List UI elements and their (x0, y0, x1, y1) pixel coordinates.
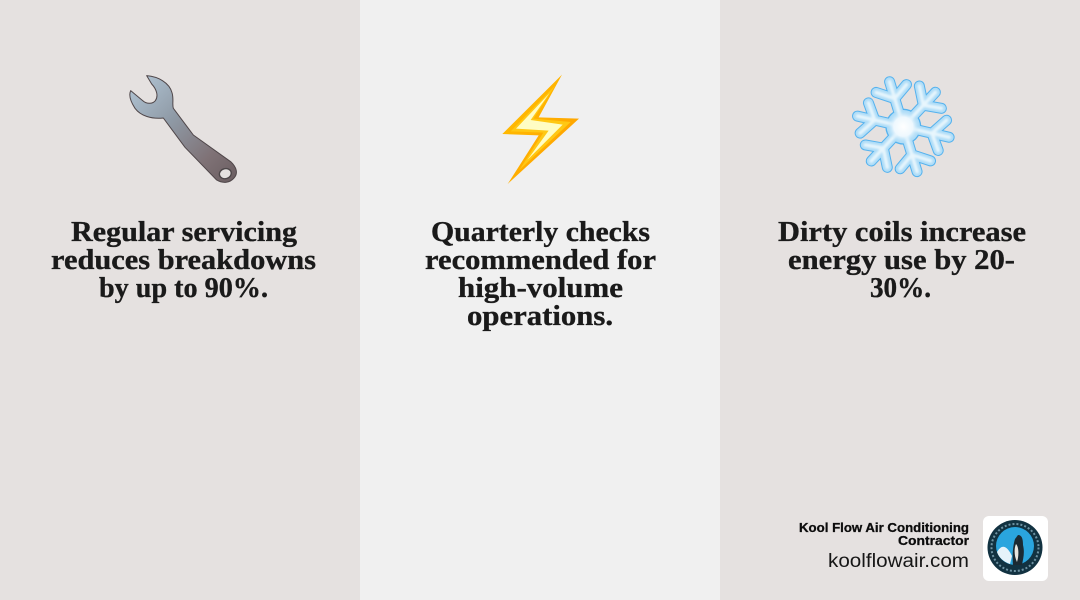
footer: company name: Kool Flow Air Conditioning (799, 520, 969, 535)
heading: quarterly checks: Quarterly checks (431, 216, 650, 248)
icon: lightning bolt (502, 75, 579, 184)
panel: servicing (0, 0, 360, 600)
heading: quarterly checks: operations. (467, 300, 613, 332)
panel: quarterly checks (360, 0, 720, 600)
heading: dirty coils: Dirty coils increase (778, 216, 1026, 248)
heading: dirty coils: 30%. (870, 272, 931, 304)
heading: servicing: by up to 90%. (99, 272, 268, 304)
heading: quarterly checks: high-volume (458, 272, 623, 304)
footer: company name: Contractor (898, 533, 969, 548)
icon: wrench (130, 76, 236, 182)
heading: servicing: Regular servicing (71, 216, 298, 248)
heading: dirty coils: energy use by 20- (788, 244, 1015, 276)
footer: website: koolflowair.com (828, 551, 969, 572)
heading: quarterly checks: recommended for (425, 244, 656, 276)
panel: dirty coils (720, 0, 1080, 600)
heading: servicing: reduces breakdowns (51, 244, 316, 276)
icon: snowflake (854, 77, 953, 176)
logo (983, 516, 1048, 581)
